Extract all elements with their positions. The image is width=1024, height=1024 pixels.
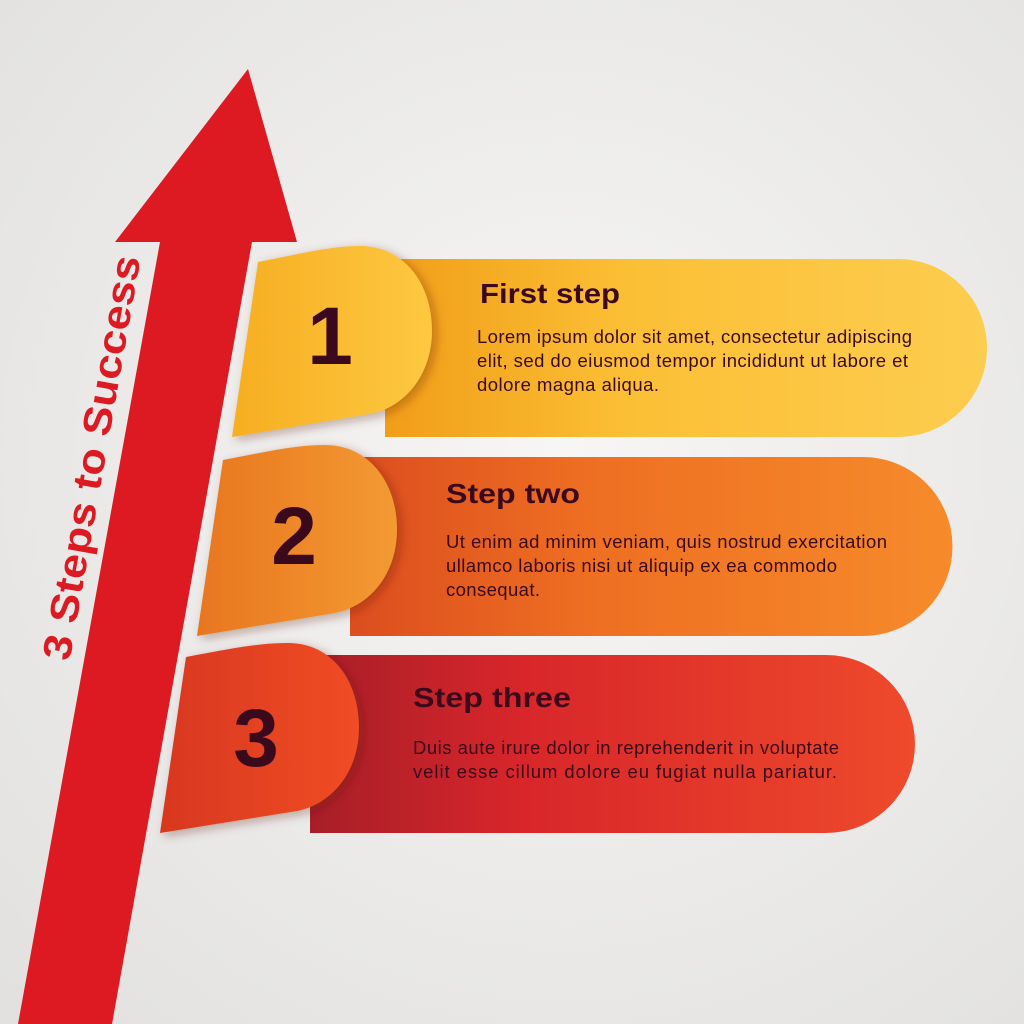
number 2: 2 [271, 491, 317, 582]
arrow [18, 69, 297, 1024]
title 2: Step two [446, 478, 580, 509]
body 1: dolore magna aliqua. [477, 374, 659, 395]
body 2: ullamco laboris nisi ut aliquip ex ea commodo [446, 555, 837, 576]
panel: step 3 [160, 643, 915, 833]
body 2: Ut enim ad minim veniam, quis nostrud exercitation [446, 531, 887, 552]
body 3: velit esse cillum dolore eu fugiat nulla pariatur. [413, 761, 837, 782]
title 3: Step three [413, 682, 571, 713]
number 3: 3 [233, 693, 279, 784]
panel: step 2 [197, 445, 952, 636]
body 1: elit, sed do eiusmod tempor incididunt ut labore et [477, 350, 908, 371]
arrow label: 3 Steps to Success [35, 252, 149, 663]
title 1: First step [480, 278, 620, 309]
panel: step 1 [232, 246, 987, 437]
body 2: consequat. [446, 579, 540, 600]
body 3: Duis aute irure dolor in reprehenderit in voluptate [413, 737, 839, 758]
number 1: 1 [307, 291, 353, 382]
body 1: Lorem ipsum dolor sit amet, consectetur adipiscing [477, 326, 912, 347]
